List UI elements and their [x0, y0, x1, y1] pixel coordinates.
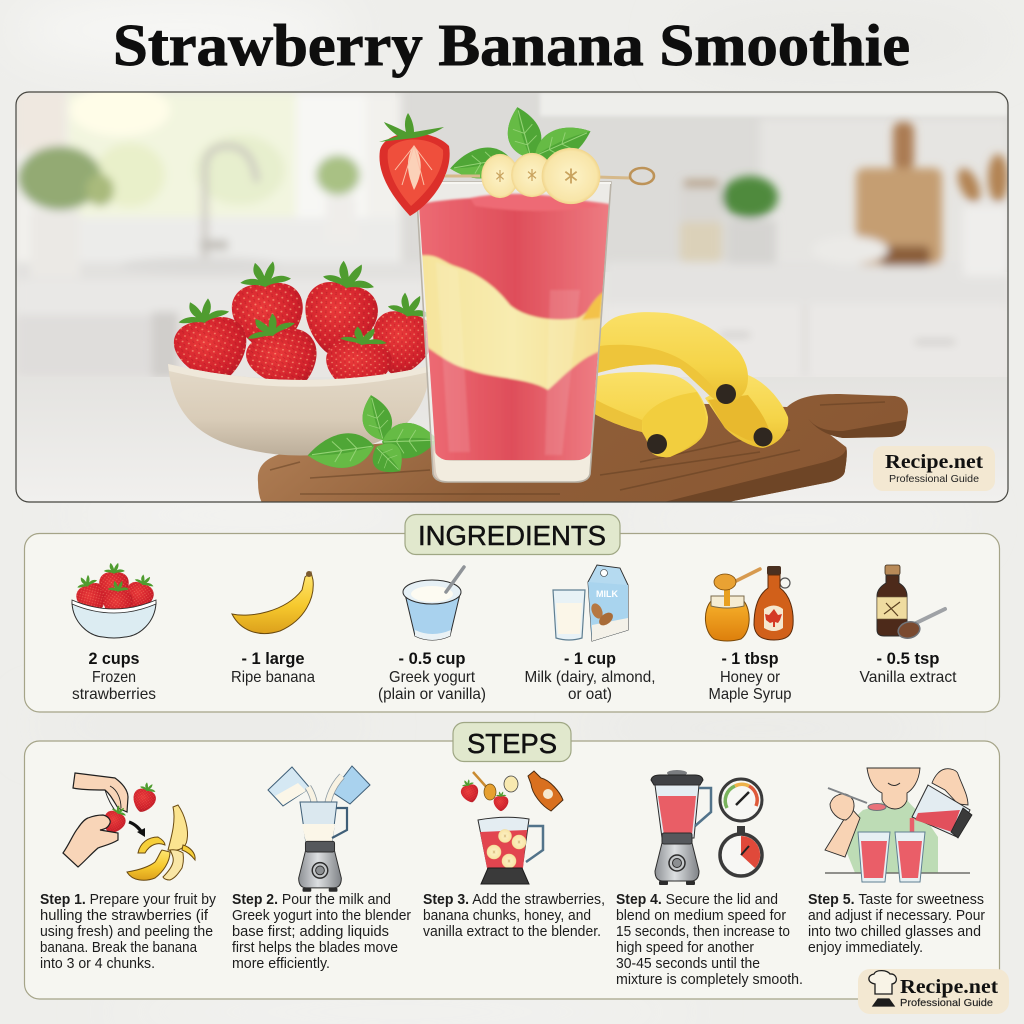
step 5: enjoy immediately. [808, 940, 923, 956]
hero photo panel [16, 84, 1009, 503]
step 3: vanilla extract to the blender. [423, 924, 601, 940]
step 5: Step 5. Taste for sweetness [808, 892, 984, 908]
cutting board [258, 394, 908, 503]
ingredient: yogurt: - 0.5 cup [398, 649, 466, 668]
icon: vanilla bottle and spoon [877, 565, 945, 641]
ingredient: milk: - 1 cup [564, 649, 616, 668]
ingredient: vanilla extract: - 0.5 tsp [876, 649, 940, 668]
smoothie glass [410, 182, 620, 482]
icon: chef hat [869, 971, 896, 1006]
step 1 [40, 773, 217, 972]
step 2: Greek yogurt into the blender [232, 908, 411, 924]
icon: honey jar and dipper [705, 569, 760, 641]
step 1: banana. Break the banana [40, 940, 198, 956]
ingredient: yogurt: (plain or vanilla) [378, 686, 486, 703]
icon: ingredients falling into blender [458, 771, 563, 884]
step 5: into two chilled glasses and [808, 924, 981, 940]
ingredient: yogurt: Greek yogurt [389, 669, 476, 686]
brand badge on photo: Professional Guide [889, 473, 979, 485]
step 1: into 3 or 4 chunks. [40, 956, 155, 972]
icon: maple syrup bottle [754, 566, 793, 640]
ingredient: honey or maple syrup: Honey or [720, 669, 781, 686]
ingredient: strawberries [70, 563, 159, 703]
brand badge on photo [873, 446, 995, 491]
ingredient: banana [231, 571, 315, 686]
ingredient: banana: - 1 large [242, 649, 304, 668]
step 2: base first; adding liquids [232, 924, 389, 940]
garnish: mint leaves [450, 107, 590, 178]
icon: bowl of strawberries [70, 563, 159, 638]
ingredient: honey or maple syrup: Maple Syrup [708, 686, 792, 703]
step 5: and adjust if necessary. Pour [808, 908, 985, 924]
step 4: 15 seconds, then increase to [616, 924, 790, 940]
mint sprig on board [308, 395, 435, 472]
brand badge, bottom right [858, 969, 1009, 1014]
step 2 [232, 766, 411, 972]
step 3: banana chunks, honey, and [423, 908, 591, 924]
ingredient: banana: Ripe banana [231, 669, 315, 686]
step 4: mixture is completely smooth. [616, 972, 803, 988]
panel: steps [24, 722, 1000, 999]
brand badge on photo: Recipe.net [885, 452, 984, 473]
icon: pouring milk and yogurt into blender [268, 766, 370, 892]
step 3 [423, 771, 605, 940]
strawberry bowl [163, 255, 442, 456]
brand badge, bottom right: Recipe.net [900, 977, 999, 998]
brand badge, bottom right: Professional Guide [900, 997, 993, 1009]
icon: person tasting and pouring into glasses [825, 768, 972, 882]
ingredient: vanilla extract [860, 565, 957, 686]
ingredient: milk: Milk (dairy, almond, [524, 669, 656, 686]
title: Strawberry Banana Smoothie [113, 12, 910, 78]
step 5 [808, 768, 985, 956]
icon: yogurt cup [403, 567, 464, 640]
step 4: Step 4. Secure the lid and [616, 892, 778, 908]
hero frame [16, 92, 1008, 502]
step 3: Step 3. Add the strawberries, [423, 892, 605, 908]
step 2: Step 2. Pour the milk and [232, 892, 391, 908]
step 4: 30-45 seconds until the [616, 956, 760, 972]
garnish: skewer with banana slices [445, 148, 654, 204]
step 4: blend on medium speed for [616, 908, 786, 924]
step 2: more efficiently. [232, 956, 330, 972]
bananas [593, 312, 788, 457]
icon: hands hulling strawberry, peeled banana [63, 773, 195, 880]
ingredient: strawberries: 2 cups [88, 649, 140, 668]
icon: milk glass and carton: MILK [596, 589, 618, 599]
kitchen background [16, 92, 1008, 406]
ingredient: strawberries: Frozen [92, 669, 136, 686]
heading: steps [453, 722, 571, 762]
strawberries in bowl [174, 260, 429, 380]
ingredient: milk: or oat) [568, 686, 612, 703]
ingredient: honey or maple syrup [705, 566, 793, 703]
icon: blender with speed dial and timer [651, 770, 762, 885]
step 1: using fresh) and peeling the [40, 924, 213, 940]
step 1: Step 1. Prepare your fruit by [40, 892, 217, 908]
ingredient: milk [524, 565, 656, 703]
icon: banana [232, 571, 313, 634]
step 4 [616, 770, 803, 988]
step 2: first helps the blades move [232, 940, 398, 956]
heading: ingredients: INGREDIENTS [418, 520, 606, 551]
step 4: high speed for another [616, 940, 754, 956]
ingredient: honey or maple syrup: - 1 tbsp [722, 649, 778, 668]
garnish: halved strawberry [379, 113, 450, 216]
panel: ingredients [24, 514, 1000, 712]
ingredient: yogurt [378, 567, 486, 703]
step 1: hulling the strawberries (if [40, 908, 209, 924]
ingredient: strawberries: strawberries [72, 686, 156, 703]
ingredient: vanilla extract: Vanilla extract [860, 669, 957, 686]
heading: steps: STEPS [467, 728, 557, 759]
heading: ingredients [405, 514, 620, 554]
